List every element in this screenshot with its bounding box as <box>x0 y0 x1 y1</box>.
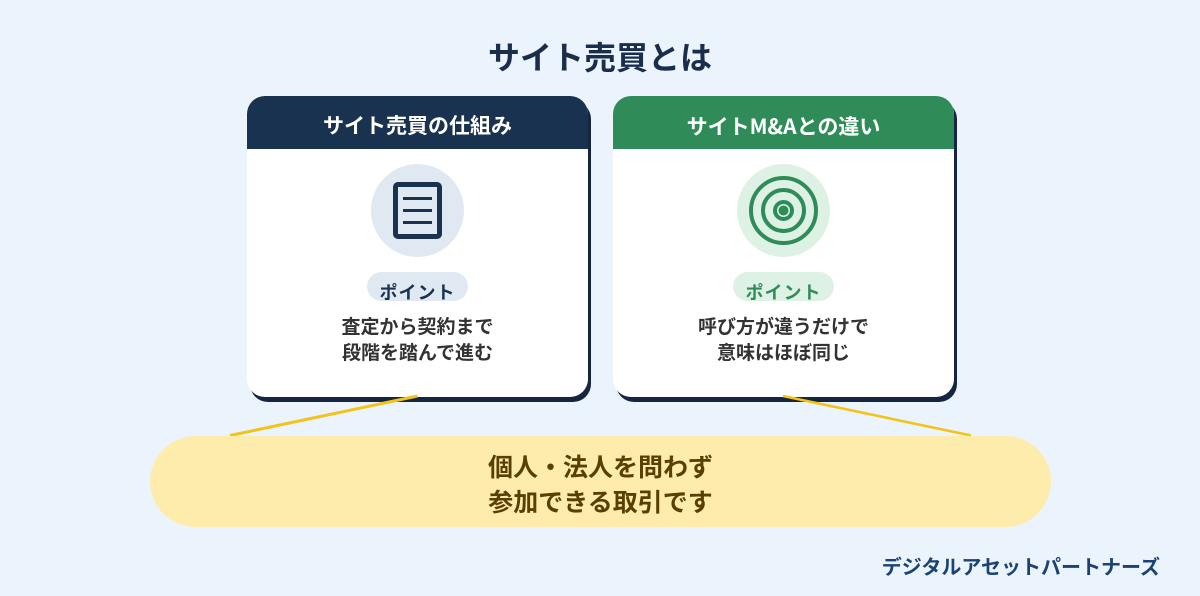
callout text: 個人・法人を問わず <box>488 454 713 482</box>
panel heading <box>613 96 954 149</box>
callout <box>150 436 1051 527</box>
point text: 査定から契約まで <box>341 317 494 338</box>
callout text: 参加できる取引です <box>488 488 713 516</box>
title: サイト売買とは <box>488 40 712 76</box>
point badge <box>367 272 468 301</box>
icon: target <box>737 164 830 257</box>
panel: サイト売買の仕組み <box>247 96 588 397</box>
callout text <box>488 454 713 516</box>
point text: 段階を踏んで進む <box>342 343 493 364</box>
panel heading <box>247 96 588 149</box>
panel heading: サイトM&Aとの違い <box>687 111 880 141</box>
point text <box>698 316 869 364</box>
point text <box>341 316 494 364</box>
icon: document <box>371 164 464 257</box>
point text: 呼び方が違うだけで <box>698 317 869 338</box>
brand credit: デジタルアセットパートナーズ <box>882 557 1160 579</box>
panel heading: サイト売買の仕組み <box>323 115 512 138</box>
point badge <box>733 272 834 301</box>
panel: サイトM&Aとの違い <box>613 96 954 397</box>
point text: 意味はほぼ同じ <box>717 343 850 364</box>
